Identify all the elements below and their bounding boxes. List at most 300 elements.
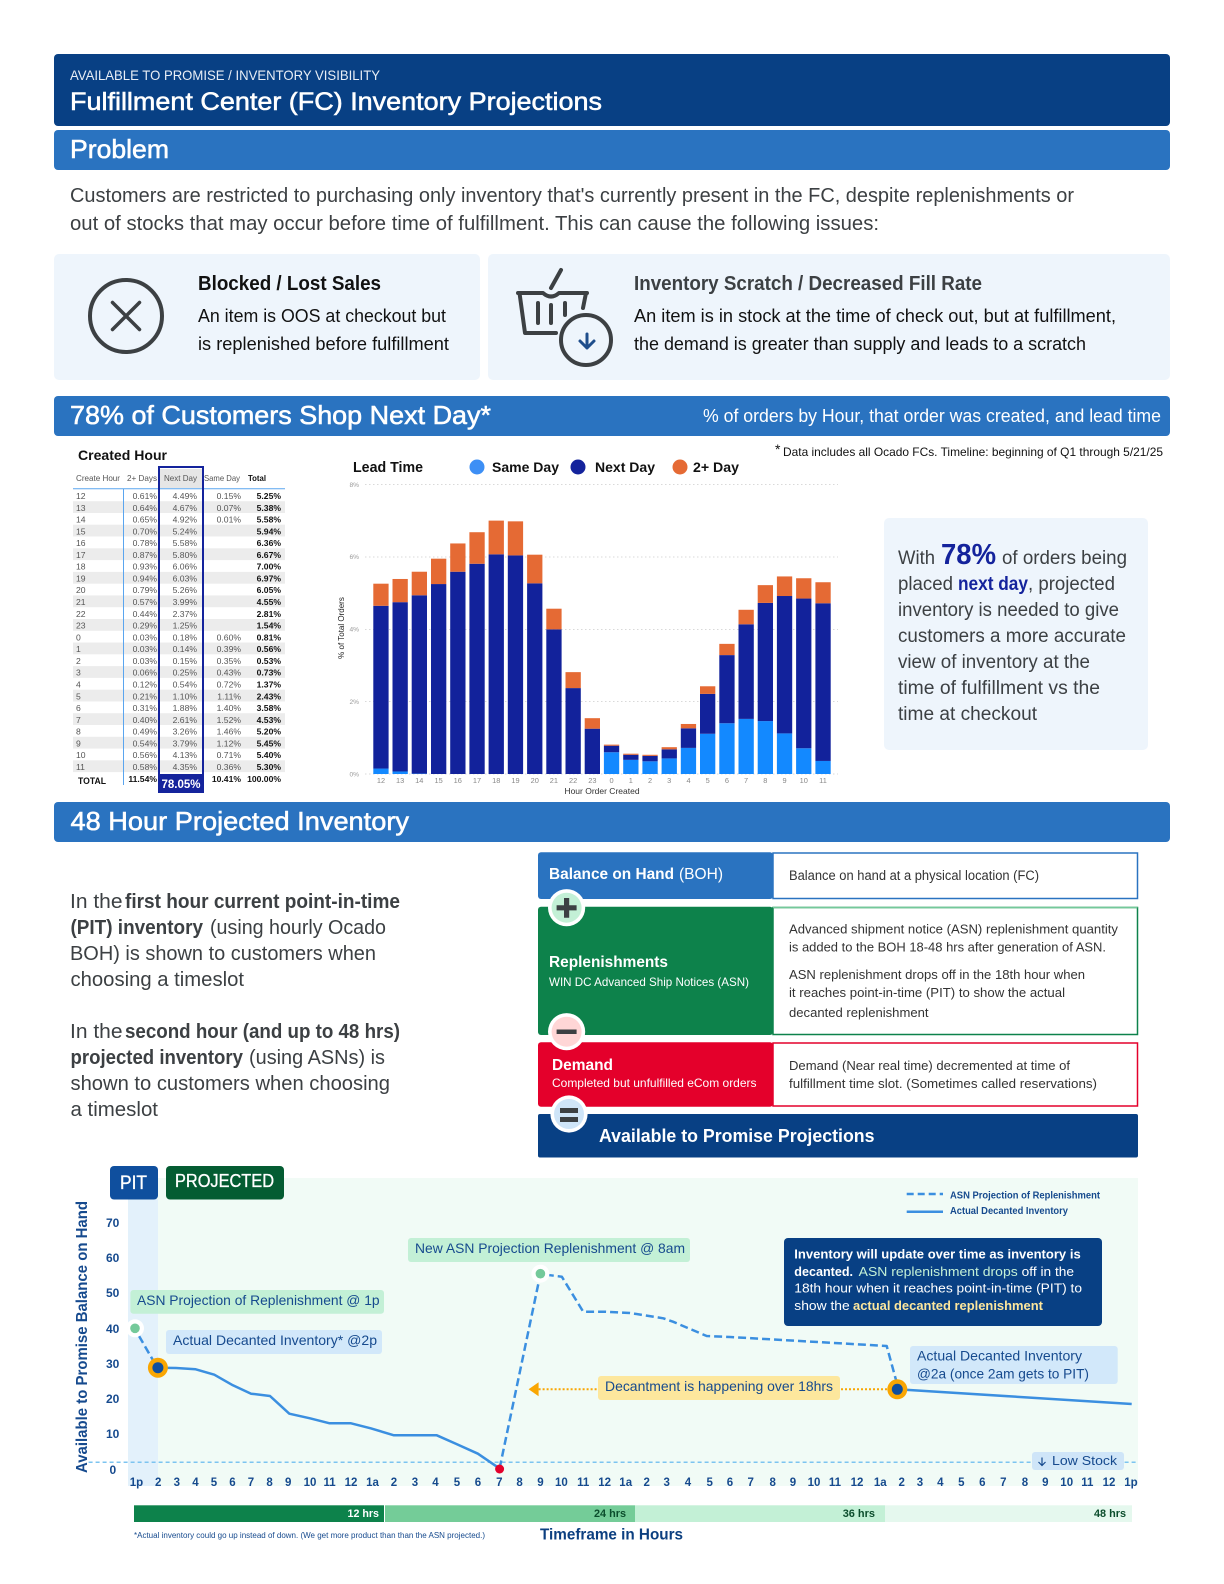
x axis labels: 1a [619, 1477, 633, 1489]
icon: plus [548, 889, 585, 926]
x axis labels: 2 [155, 1477, 161, 1489]
x axis labels: 10 [1060, 1477, 1073, 1489]
callout: 78% next day: customers a more accurate [898, 626, 1126, 647]
x axis labels: 5 [958, 1477, 965, 1489]
panel: demand: fulfillment time slot. (Sometimes called reservations) [789, 1076, 1097, 1091]
x axis labels: 7 [747, 1477, 754, 1489]
panel: inventory scratch: Inventory Scratch / Decreased Fill Rate [634, 273, 982, 295]
panel: replenishments: is added to the BOH 18-48 hrs after generation of ASN. [789, 940, 1106, 955]
bar chart: orders by lead time: 4 [686, 776, 691, 785]
table: created hour: 5.40% [257, 750, 281, 760]
table: created hour: 0.29% [133, 621, 157, 631]
text block: PIT and projected explanation: shown to customers when choosing [70, 1073, 390, 1095]
x axis labels: 8 [266, 1477, 273, 1489]
table: created hour: Next Day [164, 474, 198, 483]
heading: 48 hour projected inventory: 48 Hour Projected Inventory [70, 806, 409, 836]
table: created hour: 18 [76, 562, 86, 572]
panel: balance on hand: (BOH) [679, 866, 723, 883]
table: created hour: 7.00% [257, 562, 281, 572]
panel: blocked lost sales: An item is OOS at checkout but [198, 306, 446, 326]
table: created hour: Same Day [204, 474, 241, 483]
panel: inventory scratch [488, 254, 1170, 380]
marker: new ASN @ 8am [531, 1265, 549, 1283]
footnote: actual inventory: *Actual inventory could go up instead of down. (We get more product than than the ASN projected.) [134, 1531, 485, 1540]
table: created hour: 4.13% [173, 750, 197, 760]
x axis labels: 8 [1022, 1477, 1029, 1489]
table: created hour: 1.11% [217, 691, 241, 701]
table: created hour: 0.21% [133, 691, 157, 701]
panel: demand: Completed but unfulfilled eCom orders [552, 1076, 756, 1090]
table: created hour: 0.57% [133, 597, 157, 607]
table: created hour: 0.94% [133, 574, 157, 584]
y axis labels: 20 [106, 1392, 120, 1406]
x axis labels: 12 [851, 1477, 863, 1489]
panel: demand: Demand [552, 1057, 613, 1074]
x axis labels: 4 [192, 1477, 199, 1489]
x axis labels: 3 [663, 1477, 670, 1489]
bar chart: orders by lead time: Hour Order Created [564, 786, 640, 796]
panel: inventory scratch: An item is in stock at the time of check out, but at fulfillment, [634, 306, 1116, 326]
callout: 78% next day: next day [958, 574, 1028, 595]
callout: 78% next day: view of inventory at the [898, 652, 1090, 673]
x axis labels: 8 [516, 1477, 523, 1489]
table: created hour: 0.15% [173, 656, 197, 666]
x axis labels: 5 [454, 1477, 461, 1489]
table: created hour: 1.40% [217, 703, 241, 713]
table: created hour: 5.45% [257, 738, 281, 748]
panel: balance on hand [538, 852, 1138, 899]
table: created hour: 0.54% [173, 680, 197, 690]
table: created hour: 16 [76, 538, 86, 548]
bar chart: orders by lead time: 8 [763, 776, 767, 785]
table: created hour: 0.56% [133, 750, 157, 760]
label: actual decanted @ 2a: @2a (once 2am gets to PIT) [917, 1366, 1089, 1382]
chart legend: Next Day [595, 459, 655, 475]
table: created hour: 4.35% [173, 762, 197, 772]
chart legend: Lead Time [353, 460, 423, 476]
table: created hour: 5.38% [257, 503, 281, 513]
table: created hour: 3.79% [173, 738, 197, 748]
table: created hour: 5.25% [257, 491, 281, 501]
text block: PIT and projected explanation: In the [70, 1021, 122, 1043]
table: created hour: 0.15% [217, 491, 241, 501]
x axis labels: 2 [898, 1477, 905, 1489]
table: created hour: 0.12% [133, 680, 157, 690]
text block: problem description: Customers are restricted to purchasing only inventory that's currently present in the FC, despite replenishments or [70, 185, 1074, 207]
tag: projected [166, 1166, 284, 1200]
table: created hour: 4.55% [257, 597, 281, 607]
panel: replenishments: it reaches point-in-time (PIT) to show the actual [789, 985, 1065, 1000]
table: created hour: TOTAL [78, 776, 106, 787]
table: created hour: 0.35% [217, 656, 241, 666]
panel: replenishments: WIN DC Advanced Ship Notices (ASN) [549, 975, 749, 989]
marker: actual inventory @ 2p [148, 1358, 168, 1378]
y axis labels: 50 [106, 1286, 120, 1300]
table: created hour: 5.58% [173, 538, 197, 548]
timeline bar: 12 to 48 hours: 48 hrs [1094, 1508, 1126, 1520]
x axis labels: 9 [537, 1477, 544, 1489]
panel: available to promise projections [538, 1114, 1138, 1158]
table: created hour: 0.64% [133, 503, 157, 513]
table: created hour: 5.58% [257, 515, 281, 525]
callout: inventory update: decanted. [794, 1264, 853, 1279]
x axis labels: 9 [285, 1477, 291, 1489]
panel: replenishments: ASN replenishment drops off in the 18th hour when [789, 967, 1085, 982]
table: created hour: 21 [76, 597, 86, 607]
table: created hour: 1.25% [173, 621, 197, 631]
bar chart: orders by lead time: 12 [377, 776, 385, 785]
label: low stock [1032, 1452, 1124, 1470]
table: created hour: 0.03% [133, 644, 157, 654]
table: created hour: 5.26% [173, 585, 197, 595]
arrow: decantment span [529, 1382, 888, 1396]
callout: inventory update: Inventory will update over time as inventory is [794, 1246, 1081, 1261]
table: created hour: 0.06% [133, 668, 157, 678]
bar chart: orders by lead time: 1 [629, 776, 633, 785]
table: created hour: 8 [76, 727, 81, 737]
bar chart: orders by lead time: 6% [349, 554, 359, 561]
panel: blocked lost sales: Blocked / Lost Sales [198, 273, 381, 295]
x axis labels: 10 [555, 1477, 568, 1489]
table: created hour: 3.58% [257, 703, 281, 713]
y axis labels: 0 [110, 1463, 116, 1477]
bar chart: orders by lead time: 10 [800, 776, 808, 785]
x axis labels: 9 [790, 1477, 796, 1489]
bar chart: orders by lead time: 19 [511, 776, 520, 785]
table: created hour: 4.53% [257, 715, 281, 725]
heading: 78% of customers shop next day: 78% of Customers Shop Next Day* [70, 400, 491, 430]
text block: PIT and projected explanation: first hour current point-in-time [125, 891, 400, 913]
table: created hour: 20 [76, 585, 86, 595]
x axis labels: 1a [366, 1477, 379, 1489]
x axis labels: 8 [769, 1477, 776, 1489]
x axis labels: 11 [829, 1477, 842, 1489]
table: created hour: Created Hour [78, 447, 168, 463]
table: created hour: 17 [76, 550, 86, 560]
x axis labels: 11 [577, 1477, 590, 1489]
bar chart: orders by lead time: 13 [396, 776, 404, 785]
table: created hour: 12 [76, 491, 86, 501]
panel: blocked lost sales [54, 254, 480, 380]
timeline bar: 12 to 48 hours: 36 hrs [843, 1508, 875, 1520]
x axis labels: 6 [475, 1477, 481, 1489]
table: created hour: 0.39% [217, 644, 241, 654]
x axis labels: 9 [1042, 1477, 1049, 1489]
x axis labels: 11 [324, 1477, 336, 1489]
table: created hour: 10 [76, 750, 86, 760]
table: created hour: 0.54% [133, 738, 157, 748]
icon: equals [550, 1095, 588, 1133]
y axis labels: 10 [106, 1427, 120, 1441]
title banner: AVAILABLE TO PROMISE / INVENTORY VISIBILITY [70, 67, 381, 83]
callout: 78% next day: With [898, 548, 935, 569]
table: created hour: 23 [76, 621, 86, 631]
callout: 78% next day: inventory is needed to give [898, 600, 1119, 621]
panel: demand: Demand (Near real time) decremented at time of [789, 1058, 1070, 1073]
table: created hour: 1.10% [173, 691, 197, 701]
callout: 78% next day: placed [898, 574, 953, 595]
table: created hour: 0 [76, 632, 81, 642]
table: created hour: 0.53% [257, 656, 281, 666]
bar chart: orders by lead time: 16 [454, 776, 462, 785]
callout: 78% next day: 78% [941, 539, 996, 571]
heading: problem [54, 130, 1170, 170]
chart legend: ASN Projection of Replenishment [950, 1190, 1101, 1201]
table: created hour: 0.44% [133, 609, 157, 619]
table: created hour: 11.54% [128, 774, 157, 784]
callout: 78% next day: of orders being [1002, 548, 1127, 569]
table: created hour: 5.24% [173, 526, 197, 536]
table: created hour: 0.14% [173, 644, 197, 654]
table: created hour: 6.67% [257, 550, 281, 560]
y axis labels [106, 1216, 120, 1477]
label: low stock: Low Stock [1052, 1453, 1118, 1468]
table: created hour: 0.25% [173, 668, 197, 678]
x axis labels: 1p [130, 1477, 143, 1489]
table: created hour: 10.41% [212, 774, 241, 784]
panel: balance on hand: Balance on hand at a physical location (FC) [789, 868, 1039, 883]
table: created hour: 2+ Days [127, 474, 157, 483]
bar chart: orders by lead time: 2% [349, 699, 359, 706]
bar chart: orders by lead time [337, 459, 838, 796]
table: created hour: 1.37% [257, 680, 281, 690]
next day highlight column: 78.05% [162, 779, 200, 791]
table: created hour: 1.12% [217, 738, 241, 748]
x axis labels: 2 [391, 1477, 397, 1489]
table: created hour: 0.71% [217, 750, 241, 760]
panel: blocked lost sales: is replenished before fulfillment [198, 334, 449, 354]
table: created hour: 2.81% [257, 609, 281, 619]
table: created hour: 0.70% [133, 526, 157, 536]
x axis labels: 6 [979, 1477, 986, 1489]
table: created hour: 13 [76, 503, 86, 513]
table: created hour: Total [248, 474, 266, 483]
panel: replenishments: decanted replenishment [789, 1005, 929, 1020]
x axis labels: 12 [1103, 1477, 1115, 1489]
footnote: data note: * [775, 441, 781, 457]
text block: PIT and projected explanation: In the [70, 891, 122, 913]
table: created hour: 0.78% [133, 538, 157, 548]
table: created hour: 4.49% [173, 491, 197, 501]
panel: inventory scratch: the demand is greater than supply and leads to a scratch [634, 334, 1086, 354]
bar chart: orders by lead time: 0 [610, 776, 614, 785]
bar chart: orders by lead time: 14 [415, 776, 423, 785]
label: new ASN @ 8am [408, 1238, 690, 1262]
x axis title: Timeframe in Hours [540, 1526, 683, 1543]
table: created hour: 19 [76, 574, 86, 584]
bar chart: orders by lead time: 6 [725, 776, 729, 785]
table: created hour: 3 [76, 668, 81, 678]
x axis labels [130, 1477, 1138, 1489]
text block: PIT and projected explanation: BOH) is shown to customers when [70, 943, 376, 965]
table: created hour: 6.03% [173, 574, 197, 584]
text block: PIT and projected explanation: projected inventory [70, 1047, 244, 1069]
label: actual decanted @ 2a [910, 1346, 1118, 1384]
title banner: Fulfillment Center (FC) Inventory Projections [70, 88, 602, 116]
text block: PIT and projected explanation: (using hourly Ocado [210, 917, 386, 939]
table: created hour: 5 [76, 691, 81, 701]
table: created hour: 9 [76, 738, 81, 748]
bar chart: orders by lead time: % of Total Orders [337, 597, 346, 659]
bar chart: orders by lead time: 5 [706, 776, 710, 785]
callout: inventory update: off in the [1022, 1264, 1074, 1279]
table: created hour: 0.93% [133, 562, 157, 572]
chart legend: Same Day [492, 459, 559, 475]
table: created hour: 1 [76, 644, 81, 654]
icon: minus [548, 1013, 585, 1050]
table: created hour: 3.26% [173, 727, 197, 737]
table: created hour: 2.43% [257, 691, 281, 701]
x axis labels: 12 [598, 1477, 611, 1489]
x axis labels: 11 [1081, 1477, 1094, 1489]
bar chart: orders by lead time: 23 [588, 776, 597, 785]
table: created hour: 0.72% [217, 680, 241, 690]
callout: inventory update [784, 1238, 1102, 1326]
heading: problem: Problem [70, 134, 169, 164]
panel: replenishments: Advanced shipment notice (ASN) replenishment quantity [789, 922, 1118, 936]
table: created hour: 0.43% [217, 668, 241, 678]
x axis labels: 6 [229, 1477, 236, 1489]
callout: inventory update: 18th hour when it reaches point-in-time (PIT) to [794, 1280, 1082, 1295]
table: created hour: 0.81% [257, 632, 281, 642]
footnote: data note: Data includes all Ocado FCs. Timeline: beginning of Q1 through 5/21/25 [783, 445, 1163, 459]
line: actual decanted inventory [158, 1368, 1132, 1468]
bar chart: orders by lead time: 11 [819, 776, 827, 785]
callout: inventory update: ASN replenishment drops [859, 1264, 1018, 1279]
label: ASN projection @ 1p: ASN Projection of Replenishment @ 1p [137, 1292, 380, 1308]
tag: PIT [110, 1166, 158, 1200]
table: created hour: 11 [76, 762, 85, 772]
heading: 48 hour projected inventory [54, 802, 1170, 842]
table: created hour: 0.01% [217, 515, 241, 525]
x axis labels: 7 [248, 1477, 254, 1489]
table: created hour: 0.03% [133, 656, 157, 666]
chart legend: Actual Decanted Inventory [950, 1206, 1068, 1217]
y axis labels: 60 [106, 1251, 120, 1265]
x axis labels: 4 [432, 1477, 439, 1489]
table: created hour: 5.80% [173, 550, 197, 560]
x axis labels: 4 [685, 1477, 692, 1489]
table: created hour: 4.67% [173, 503, 197, 513]
x axis labels: 1a [874, 1477, 887, 1489]
callout: 78% next day: time of fulfillment vs the [898, 678, 1100, 699]
table: created hour: 4.92% [173, 515, 197, 525]
table: created hour: 0.40% [133, 715, 157, 725]
tag: projected: PROJECTED [175, 1171, 274, 1191]
label: actual decanted @ 2a: Actual Decanted Inventory [917, 1348, 1082, 1364]
table: created hour: 0.65% [133, 515, 157, 525]
line chart: 48 hour projected inventory [74, 1166, 1138, 1489]
bar chart: orders by lead time: 17 [473, 776, 481, 785]
y axis labels: 70 [106, 1216, 120, 1230]
callout: inventory update: actual decanted replenishment [853, 1298, 1044, 1313]
callout: 78% next day: , projected [1028, 574, 1115, 595]
marker: stock out [495, 1464, 504, 1474]
table: created hour: 0.36% [217, 762, 241, 772]
bar chart: orders by lead time: 15 [434, 776, 443, 785]
icon: basket with down arrow [518, 270, 611, 365]
table: created hour: 2.61% [173, 715, 197, 725]
label: actual decanted @ 2p [166, 1330, 382, 1354]
chart legend [907, 1190, 1101, 1217]
x axis labels: 5 [706, 1477, 713, 1489]
bar chart: orders by lead time: 20 [531, 776, 539, 785]
text block: PIT and projected explanation: (using ASNs) is [249, 1047, 385, 1069]
table: created hour: 5.20% [257, 727, 281, 737]
bar chart: orders by lead time: 22 [569, 776, 577, 785]
icon: x in circle [90, 280, 162, 352]
label: actual decanted @ 2p: Actual Decanted Inventory* @2p [173, 1332, 377, 1348]
table: created hour: 0.61% [133, 491, 157, 501]
marker: ASN projection @ 1p [126, 1319, 144, 1337]
heading: 78% of customers shop next day [54, 396, 1170, 436]
panel: replenishments: Replenishments [549, 954, 668, 971]
table: created hour: 0.03% [133, 632, 157, 642]
table: created hour: 0.56% [257, 644, 281, 654]
line: ASN projection of replenishment [139, 1274, 896, 1468]
label: decantment [598, 1376, 840, 1400]
table: created hour: 7 [76, 715, 81, 725]
table: created hour: 0.31% [133, 703, 157, 713]
text block: PIT and projected explanation: choosing a timeslot [70, 969, 244, 991]
table: created hour: 1.52% [217, 715, 241, 725]
table: created hour: 0.60% [217, 632, 241, 642]
timeline bar: 12 to 48 hours [134, 1505, 1132, 1522]
table: created hour: 0.73% [257, 668, 281, 678]
bar chart: orders by lead time: 0% [349, 772, 359, 778]
table: created hour: 1.54% [257, 621, 281, 631]
bar chart: orders by lead time: 2 [648, 776, 652, 785]
table: created hour: 6.36% [257, 538, 281, 548]
table: created hour: 0.79% [133, 585, 157, 595]
x axis labels: 10 [808, 1477, 820, 1489]
text block: PIT and projected explanation [70, 891, 400, 1121]
title banner [54, 54, 1170, 126]
x axis labels: 7 [496, 1477, 503, 1489]
chart legend [353, 459, 739, 476]
bar chart: orders by lead time: 3 [667, 776, 671, 785]
table: created hour: 100.00% [247, 774, 281, 784]
bar chart: orders by lead time: 21 [550, 776, 558, 785]
table: created hour: 6.05% [257, 585, 281, 595]
x axis labels: 10 [304, 1477, 316, 1489]
bar chart: orders by lead time: 7 [744, 776, 748, 785]
marker: actual inventory @ 2a [887, 1379, 907, 1399]
x axis labels: 6 [727, 1477, 733, 1489]
x axis labels: 3 [174, 1477, 180, 1489]
text block: problem description [70, 185, 1074, 235]
table: created hour: 22 [76, 609, 86, 619]
timeline bar: 12 to 48 hours: 12 hrs [348, 1508, 379, 1520]
chart legend: 2+ Day [693, 459, 739, 475]
table: created hour: 5.94% [257, 526, 281, 536]
panel: demand [538, 1042, 1138, 1107]
table: created hour [73, 447, 285, 793]
table: created hour: 14 [76, 515, 86, 525]
table: created hour: 15 [76, 526, 86, 536]
x axis labels: 1p [1124, 1477, 1138, 1489]
tag: PIT: PIT [120, 1173, 147, 1194]
label: decantment: Decantment is happening over 18hrs [605, 1378, 833, 1394]
panel: replenishments [538, 907, 1138, 1035]
next day highlight column [158, 467, 204, 793]
panel: available to promise projections: Available to Promise Projections [599, 1126, 874, 1146]
y axis labels: 40 [106, 1322, 120, 1336]
table: created hour: 0.87% [133, 550, 157, 560]
x axis labels: 7 [1000, 1477, 1007, 1489]
table: created hour: 1.88% [173, 703, 197, 713]
table: created hour: 3.99% [173, 597, 197, 607]
